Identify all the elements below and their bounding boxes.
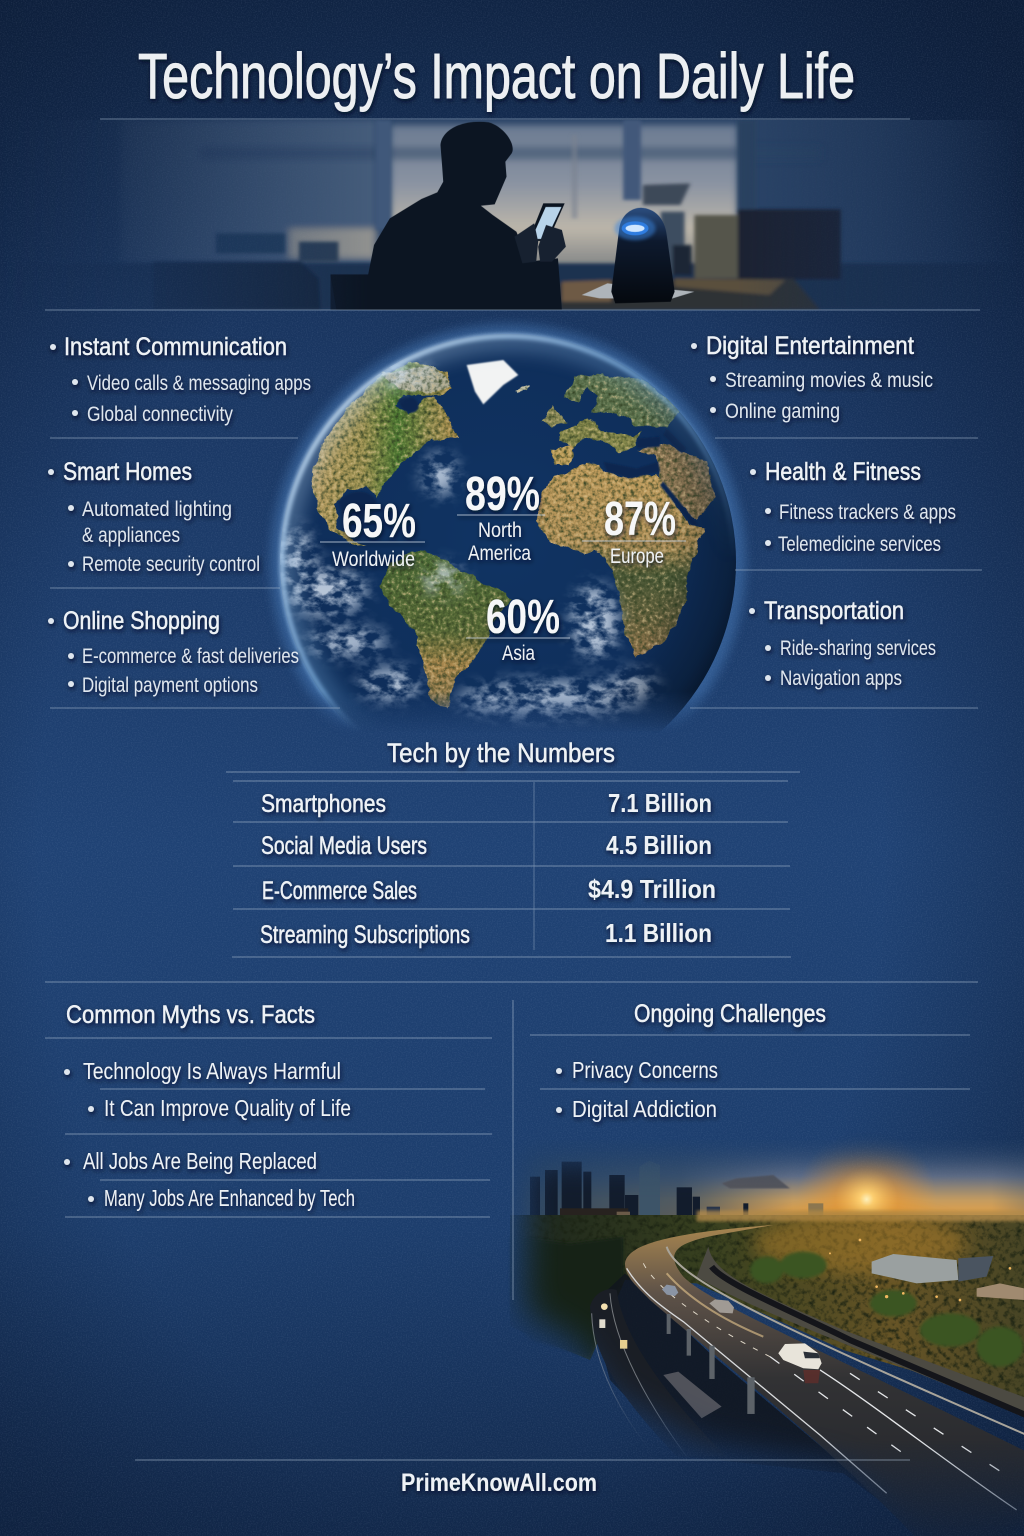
panel: smart homes: Remote security control [82, 553, 260, 576]
stat: 89% North America [457, 468, 545, 565]
panel: smart homes: & appliances [82, 524, 180, 547]
icon: blue car [662, 1285, 678, 1296]
stat: 89% North America: North [478, 519, 522, 542]
heading: challenges: Ongoing Challenges [634, 1000, 826, 1028]
panel: common myths vs facts [64, 1001, 355, 1211]
challenge: privacy: Privacy Concerns [572, 1057, 718, 1083]
photo: person using phone with smart speaker [122, 120, 972, 310]
panel: digital entertainment: Streaming movies & music [725, 369, 933, 392]
stat: 65% Worldwide: Worldwide [332, 548, 415, 571]
fact 2 [88, 1185, 355, 1211]
row: social media users: 4.5 Billion [606, 830, 712, 860]
dark under-deck [606, 1274, 875, 1497]
panel: ongoing challenges [556, 1000, 826, 1122]
line under globe sections [50, 438, 982, 708]
main deck [625, 1225, 1024, 1536]
stat: 87% Europe: Europe [610, 545, 664, 568]
stat: 89% North America: America [468, 542, 531, 565]
panel: digital entertainment [691, 332, 933, 423]
stat: 60% Asia: Asia [502, 642, 535, 665]
icon: greenland ice [467, 360, 518, 404]
second roadway [696, 1247, 1024, 1411]
panel: online shopping: E-commerce & fast deliveries [82, 645, 299, 668]
divider lines: top [45, 119, 980, 310]
panel: transportation [749, 597, 936, 690]
panel: transportation: Navigation apps [780, 667, 902, 690]
panel: online shopping: Digital payment options [82, 674, 258, 697]
panel: instant communication [50, 333, 311, 426]
table: tech by the numbers [226, 738, 800, 957]
icon: grey car [709, 1299, 734, 1313]
panel: smart homes: Automated lighting [82, 498, 232, 521]
silhouette of man [331, 122, 562, 310]
panel: health and fitness [750, 458, 956, 556]
panel: digital entertainment: Online gaming [725, 400, 840, 423]
stat: 60% Asia: 60% [486, 591, 560, 644]
stat: 60% Asia [466, 591, 570, 665]
row: social media users: Social Media Users [261, 832, 427, 860]
row: e-commerce sales [262, 874, 716, 905]
panel: smart homes [48, 458, 260, 576]
panel: health and fitness: Fitness trackers & apps [779, 501, 956, 524]
stat: 65% Worldwide: 65% [342, 495, 416, 548]
footer: PrimeKnowAll.com [401, 1469, 597, 1497]
panel: instant communication: Instant Communication [64, 333, 287, 361]
row: e-commerce sales: E-Commerce Sales [262, 877, 417, 905]
panel: smart homes: Smart Homes [63, 458, 192, 486]
challenge: addiction: Digital Addiction [572, 1096, 717, 1122]
panel: transportation: Ride-sharing services [780, 637, 936, 660]
stat: 89% North America: 89% [465, 468, 540, 521]
stat: 87% Europe: 87% [604, 493, 676, 546]
row: smartphones: 7.1 Billion [608, 788, 712, 818]
row: streaming subscriptions: Streaming Subscriptions [260, 921, 470, 949]
lower road [590, 1290, 676, 1446]
panel: digital entertainment: Digital Entertainment [706, 332, 914, 360]
panel: instant communication: Global connectivity [87, 403, 233, 426]
highway city photo [510, 1129, 1024, 1536]
panel: transportation: Transportation [764, 597, 904, 625]
table heading: Tech by the Numbers [387, 738, 615, 768]
icon: smart speaker [611, 208, 675, 303]
myth 2: All Jobs Are Being Replaced [83, 1148, 317, 1174]
panel: online shopping [48, 607, 299, 697]
panel: instant communication: Video calls & messaging apps [87, 372, 311, 395]
stat: 65% Worldwide [320, 495, 425, 571]
myth 1: Technology Is Always Harmful [83, 1058, 341, 1084]
stat: 87% Europe [582, 493, 686, 568]
panel: health and fitness: Health & Fitness [765, 458, 921, 486]
row: smartphones [261, 788, 712, 818]
heading: myths: Common Myths vs. Facts [66, 1001, 315, 1029]
row: smartphones: Smartphones [261, 790, 386, 818]
panel: online shopping: Online Shopping [63, 607, 220, 635]
row: e-commerce sales: $4.9 Trillion [588, 874, 716, 904]
icon: smartphone [534, 203, 565, 242]
fact 2: Many Jobs Are Enhanced by Tech [104, 1185, 355, 1211]
globe statistics [320, 468, 686, 665]
row: social media users [261, 830, 712, 860]
globe [266, 320, 750, 728]
panel: health and fitness: Telemedicine services [778, 533, 941, 556]
ground and trees [510, 1215, 1024, 1397]
icon: white car [778, 1343, 822, 1383]
divider lines: bottom section [45, 982, 978, 1460]
fact 1: It Can Improve Quality of Life [104, 1095, 351, 1121]
row: streaming subscriptions: 1.1 Billion [605, 918, 712, 948]
row: streaming subscriptions [260, 918, 712, 949]
clouds [280, 365, 657, 722]
